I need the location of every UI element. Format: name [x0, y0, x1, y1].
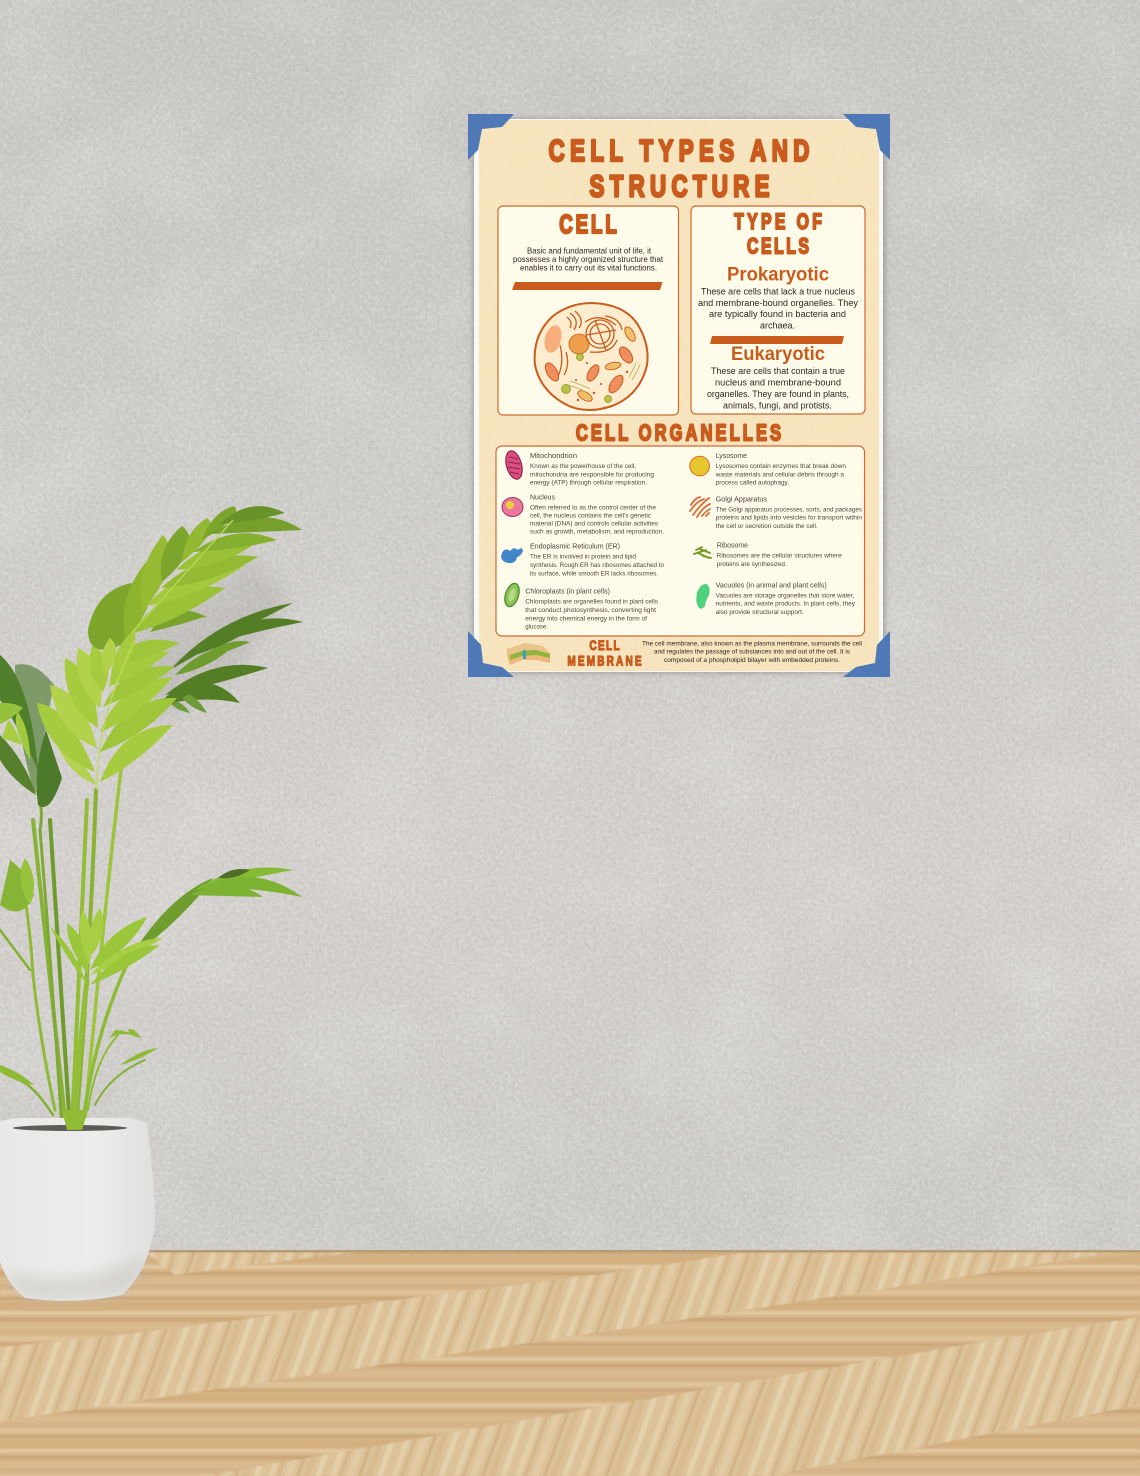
eukaryotic block: Eukaryotic — [731, 344, 825, 365]
cell membrane strip — [507, 637, 862, 669]
organelle: endoplasmic reticulum: synthesis. Rough ER has ribosomes attached to — [530, 562, 664, 569]
main title: STRUCTURE — [590, 169, 769, 203]
panel: type of cells — [691, 206, 865, 414]
panel: cell organelles — [496, 446, 864, 636]
organelle: endoplasmic reticulum — [501, 544, 664, 577]
wooden herringbone floor — [0, 1250, 1140, 1476]
icon: vacuole — [696, 584, 710, 609]
membrane heading: MEMBRANE — [567, 653, 642, 669]
organelle: ribosome: Ribosomes are the cellular structures where — [717, 553, 842, 560]
organelle: endoplasmic reticulum: The ER is involved in protein and lipid — [530, 554, 636, 561]
bright centre frond — [37, 631, 180, 790]
prokaryotic block: and membrane-bound organelles. They — [698, 298, 858, 309]
organelle: golgi apparatus: The Golgi apparatus processes, sorts, and packages — [716, 507, 862, 514]
cell description — [513, 245, 664, 272]
cell divider bar — [512, 282, 662, 290]
organelle: mitochondrion: energy (ATP) through cellular respiration. — [530, 479, 647, 486]
dark frond — [150, 603, 303, 715]
icon: nucleus — [502, 498, 523, 516]
types heading: CELLS — [747, 235, 809, 259]
membrane heading: CELL — [589, 637, 620, 653]
icon: lysosome — [690, 456, 709, 476]
potted palm plant — [0, 506, 303, 1301]
poster — [468, 114, 890, 677]
white poster frame — [474, 119, 883, 672]
main title — [549, 133, 809, 203]
eukaryotic block: nucleus and membrane-bound — [715, 378, 841, 388]
organelle: nucleus: Often referred to as the control center of the — [530, 504, 657, 511]
prokaryotic block: are typically found in bacteria and — [709, 309, 846, 320]
organelle: vacuoles: nutrients, and waste products. In plant cells, they — [716, 601, 856, 608]
types heading — [734, 211, 822, 259]
main title: CELL TYPES AND — [549, 133, 809, 168]
blue corner tabs — [468, 114, 890, 677]
organelle: endoplasmic reticulum: its surface, while smooth ER lacks ribosomes. — [530, 570, 658, 577]
prokaryotic block: archaea. — [760, 320, 795, 332]
cell diagram — [535, 303, 648, 410]
organelle: chloroplasts: glucose. — [525, 623, 548, 630]
cream paper — [479, 120, 879, 671]
organelle: mitochondrion: Mitochondrion — [530, 453, 577, 460]
organelle: mitochondrion: Known as the powerhouse of the cell, — [530, 463, 636, 470]
organelle: nucleus: material (DNA) and controls cellular activities — [530, 521, 658, 528]
organelle: vacuoles — [696, 583, 856, 616]
organelle: nucleus: Nucleus — [530, 494, 555, 501]
organelle: chloroplasts: that conduct photosynthesis, converting light — [525, 607, 656, 614]
cell description: Basic and fundamental unit of life, it — [527, 245, 652, 255]
organelle: lysosome: Lysosomes contain enzymes that break down — [716, 463, 847, 470]
eukaryotic block: organelles. They are found in plants, — [707, 389, 849, 400]
organelle: ribosome: Ribosome — [717, 543, 748, 550]
organelle: vacuoles: Vacuoles (in animal and plant cells) — [716, 583, 827, 590]
organelle: lysosome — [690, 453, 847, 486]
organelle: lysosome: Lysosome — [716, 453, 747, 460]
cell description: possesses a highly organized structure that — [513, 254, 664, 264]
membrane heading — [567, 637, 642, 669]
organelle: endoplasmic reticulum: Endoplasmic Reticulum (ER) — [530, 544, 620, 551]
lower frond — [0, 858, 302, 1085]
prokaryotic block: Prokaryotic — [727, 265, 829, 286]
membrane description: composed of a phospholipid bilayer with embedded proteins. — [664, 657, 840, 664]
panel: cell — [498, 206, 678, 415]
organelle: mitochondrion: mitochondria are responsible for producing — [530, 471, 655, 478]
icon: golgi apparatus — [690, 497, 710, 517]
poster shadow — [473, 119, 885, 673]
icon: ribosome — [694, 547, 711, 558]
plant shadow on wall — [120, 560, 290, 720]
organelle: vacuoles: also provide structural support. — [716, 609, 804, 616]
organelle: lysosome: waste materials and cellular debris through a — [715, 471, 844, 478]
white pot — [0, 1110, 155, 1301]
eukaryotic block: These are cells that contain a true — [711, 366, 845, 377]
organelle: ribosome: proteins are synthesized. — [717, 561, 787, 568]
icon: membrane slice — [507, 643, 550, 665]
types divider bar — [710, 336, 844, 344]
types heading: TYPE OF — [734, 211, 822, 235]
icon: mitochondrion — [503, 449, 525, 481]
membrane description — [642, 641, 862, 664]
organelle: golgi apparatus: Golgi Apparatus — [716, 497, 768, 504]
left dark frond — [0, 655, 62, 807]
upper large frond — [88, 506, 302, 650]
prokaryotic block: These are cells that lack a true nucleus — [701, 286, 855, 298]
membrane description: The cell membrane, also known as the plasma membrane, surrounds the cell — [642, 641, 862, 648]
organelle: chloroplasts: energy into chemical energy in the form of — [525, 615, 647, 622]
organelle: golgi apparatus: the cell or secretion outside the cell. — [716, 523, 818, 530]
cell heading: CELL — [559, 209, 617, 239]
membrane description: and regulates the passage of substances into and out of the cell. It is — [654, 649, 851, 656]
organelle: chloroplasts — [502, 582, 658, 630]
organelle: vacuoles: Vacuoles are storage organelles that store water, — [716, 593, 855, 600]
organelle: mitochondrion — [503, 449, 655, 486]
organelle: golgi apparatus — [690, 497, 863, 530]
eukaryotic block — [707, 344, 849, 412]
plant stems — [0, 745, 213, 1128]
eukaryotic block: animals, fungi, and protists. — [723, 400, 832, 412]
organelle: chloroplasts: Chloroplasts are organelles found in plant cells — [525, 599, 658, 606]
organelle: nucleus — [502, 494, 664, 536]
organelle: nucleus: cell, the nucleus contains the cell's genetic — [530, 512, 651, 519]
organelle: nucleus: such as growth, metabolism, and reproduction. — [530, 529, 664, 536]
icon: chloroplast — [502, 582, 522, 608]
icon: endoplasmic reticulum — [501, 548, 523, 563]
organelle: golgi apparatus: proteins and lipids into vesicles for transport within — [716, 515, 863, 522]
organelle: lysosome: process called autophagy. — [716, 479, 789, 486]
organelle: chloroplasts: Chloroplasts (in plant cells) — [525, 589, 610, 596]
organelle: ribosome — [694, 543, 842, 568]
organelles heading: CELL ORGANELLES — [576, 421, 781, 446]
cell description: enables it to carry out its vital functions. — [520, 262, 657, 272]
prokaryotic block — [698, 265, 858, 332]
